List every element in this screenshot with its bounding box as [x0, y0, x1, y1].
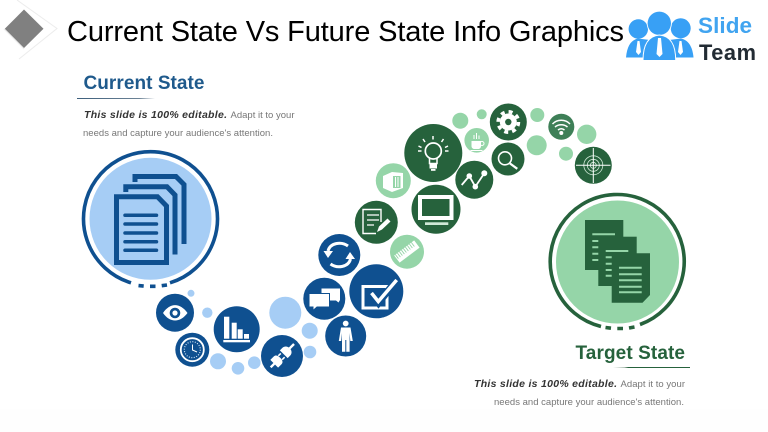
text block: current state description: This slide is 100% editable.	[84, 109, 227, 121]
heading: Target State: Target State	[576, 343, 685, 364]
text block: target state description: needs and capture your audience's attention.	[494, 397, 684, 408]
icon: line chart	[455, 161, 493, 199]
icon: wifi	[548, 114, 574, 140]
text block: target state description	[474, 378, 685, 408]
logo: SlideTeam	[626, 11, 756, 65]
icon: bar chart	[214, 306, 260, 352]
icon: plug	[261, 335, 303, 377]
panel: current state text	[77, 73, 294, 139]
logo: SlideTeam: Team	[699, 40, 756, 65]
icon: stack of documents	[116, 176, 184, 262]
text block: current state description: Adapt it to your	[230, 110, 294, 121]
text block: target state description: This slide is 100% editable.	[474, 378, 617, 390]
title: Current State Vs Future State Info Graphics	[67, 16, 624, 48]
text block: current state description	[83, 109, 294, 139]
panel: target state text	[474, 343, 690, 408]
icon: speech bubbles	[303, 278, 345, 320]
panel: current state circle	[84, 152, 218, 286]
icon: target	[575, 147, 612, 184]
icon: clock	[175, 333, 209, 367]
icon: note and pencil	[355, 201, 398, 244]
heading: Current State: Current State	[84, 73, 204, 94]
icon: coffee cup	[464, 128, 489, 153]
icon: light bulb	[404, 124, 462, 182]
icon: gear	[490, 104, 527, 140]
icon: monitor	[412, 185, 460, 234]
text block: current state description: needs and capture your audience's attention.	[83, 128, 273, 139]
icon: refresh arrows	[318, 234, 360, 276]
decorative dots: green trail	[452, 108, 596, 161]
text block: target state description: Adapt it to your	[620, 379, 685, 390]
panel: target state circle	[550, 194, 684, 328]
icon: title diamond	[4, 0, 57, 59]
icon: ruler	[390, 235, 424, 269]
icon: check box	[349, 264, 403, 318]
icon: magnifier	[492, 142, 524, 176]
icon: open box	[376, 163, 411, 198]
icon: person	[325, 316, 366, 356]
icon: eye	[156, 294, 194, 332]
decorative dots: blue trail	[188, 290, 318, 375]
logo: SlideTeam: Slide	[698, 13, 752, 38]
icon: overlapping documents	[585, 220, 650, 303]
